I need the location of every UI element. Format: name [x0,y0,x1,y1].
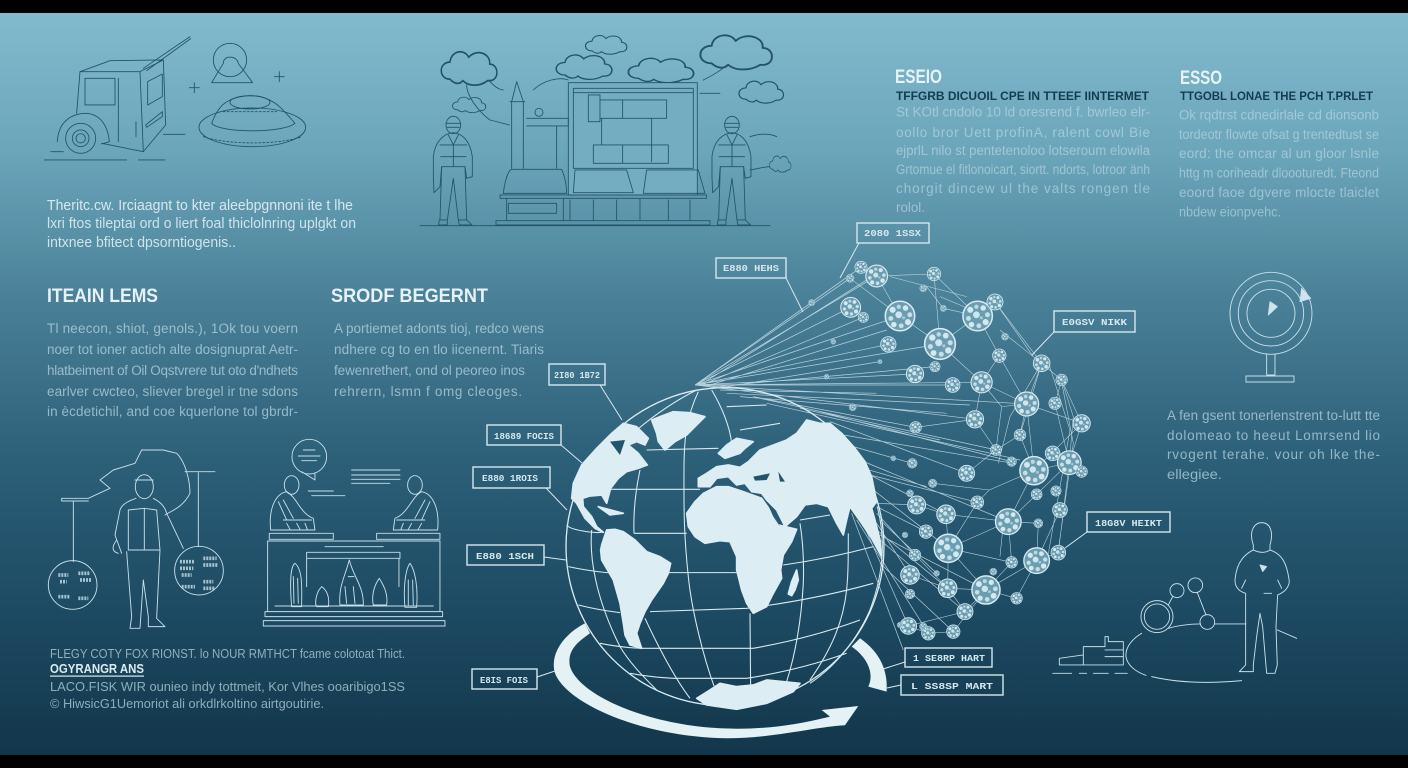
callout: 18689 FOCIS: 18689 FOCIS [494,431,554,442]
globe grid [566,388,884,706]
text block: left column: hlatbeiment of Oil Oqstvrere tut oto d'ndhets [47,363,298,378]
callout: 18689 FOCIS [487,425,582,463]
icon: dial on stand [1230,272,1312,382]
text block: left column: Tl neecon, shiot, genols.), 1Ok tou voern [47,321,298,336]
text block: ESSO column: nbdew eionpvehc. [1179,204,1281,220]
text block: ESSO column: eoord faoe dgvere mlocte tlaiclet [1179,185,1379,200]
heading: left column: ITEAIN LEMS [47,286,158,307]
text block: bottom left: OGYRANGR ANS [50,662,144,676]
text block: middle column: fewenrethert, ond ol peoreo inos [334,363,525,378]
text block: ESEIO column: oollo bror Uett profinA, ralent cowl Bie [896,125,1150,140]
network fan lines [695,267,1027,650]
callout: E8IS FOIS: E8IS FOIS [480,675,528,686]
callout: 1 SE8RP HART: 1 SE8RP HART [913,653,985,664]
heading: middle column: SRODF BEGERNT [331,286,488,307]
callout: L SS8SP MART: L SS8SP MART [911,681,993,692]
text block: left column: earlver cwcteo, sliever bregel ir tne sdons [47,384,298,399]
callout: L SS8SP MART [887,675,1003,695]
text block: right middle: dolomeao to heeut Lomrsend lio [1167,428,1380,443]
text block: middle column: ndhere cg to en tlo iicenernt. Tiaris [334,342,544,357]
callout: 18G8V HEIKT: 18G8V HEIKT [1095,518,1162,529]
callout: 2080 1SSX [840,223,929,278]
text block: right middle: ellegiee. [1167,467,1222,482]
callout: E880 1SCH [467,545,566,565]
network nodes [808,261,1090,640]
icon: man with hanging scale [48,450,223,628]
callout: 18G8V HEIKT [1065,512,1170,548]
callout: 2I80 1B72 [549,364,622,420]
subheading: ESEIO column: TFFGRB DICUOIL CPE IN TTEEF IINTERMET [896,89,1150,103]
text block: ESEIO column [896,104,1150,215]
callout: E880 1ROIS [473,467,567,510]
text block: top left intro [47,198,356,251]
text block: ESEIO column: St KOtl cndolo 10 ld oresrend f. bwrleo elr- [896,104,1150,120]
icon: truck and hat sketch [44,37,306,160]
network mesh lines [850,274,1082,633]
text block: left column [47,321,298,419]
text block: bottom left: LACO.FISK WIR ounieo indy tottmeit, Kor Vlhes ooaribigo1SS [50,679,405,694]
callout: E880 HEHS [716,258,803,312]
heading: ESEIO column: ESEIO [895,67,942,88]
text block: top left intro: Theritc.cw. Irciaagnt to kter aleebpgnnoni ite t lhe [47,198,353,214]
text block: ESSO column: tordeotr flowte ofsat g trentedtust se [1179,127,1379,142]
icon: monks and temple diorama [263,439,445,626]
text block: middle column: rehrern, lsmn f omg cleoges. [334,384,522,399]
text block: bottom left: FLEGY COTY FOX RIONST. lo NOUR RMTHCT fcame colotoat Thict. [50,647,405,661]
callout: E0GSV NIKK [1032,311,1135,355]
text block: middle column [334,321,544,399]
callout: E880 1ROIS: E880 1ROIS [482,473,538,484]
continents [572,412,882,709]
icon: man standing with linked nodes and boat [1053,523,1297,682]
text block: left column: in ècdetichil, and coe kquerlone tol gbrdr- [47,404,298,419]
inland seas [610,440,785,527]
text block: right middle: A fen gsent tonerlenstrent to-lutt tte [1167,408,1380,423]
text block: bottom left [50,647,405,711]
callout: E0GSV NIKK: E0GSV NIKK [1062,317,1127,328]
callout: E8IS FOIS [472,669,555,689]
text block: ESSO column: httg m coriheadr dloooturedt. Fteond [1179,166,1379,180]
text block: ESSO column: Ok rqdtrst cdnedirlale cd dionsonb [1179,108,1379,122]
text block: ESEIO column: chorgit dincew ul the valts rongen tle [896,181,1150,196]
callout: E880 HEHS: E880 HEHS [723,263,779,274]
text block: ESEIO column: ejprlL nilo st pentetenoloo lotseroum elowila [896,143,1150,158]
icon: control station with workers and clouds [420,35,791,226]
text block: bottom left: © HiwsicG1Uemoriot ali orkdlrkoltino airtgoutirie. [50,696,324,711]
chart: network of nodes [695,261,1090,650]
callout: 2080 1SSX: 2080 1SSX [864,228,921,239]
text block: ESEIO column: rolol. [896,200,925,215]
heading: ESSO column: ESSO [1180,68,1222,89]
text block: ESEIO column: Grtomue el fitlonoicart, siortt. ndorts, lotroor änh [896,162,1150,177]
text block: middle column: A portiemet adonts tioj, redco wens [334,321,544,336]
text block: top left intro: lxri ftos tileptai ord o liert foal thiclolnring uplgkt on [47,216,356,232]
text block: left column: noer tot ioner actich alte dosignuprat Aetr- [47,342,298,357]
text block: right middle [1167,408,1380,482]
arrow: swoosh [554,623,887,738]
text block: ESSO column: eord: the omcar al un gloor lsnle [1179,146,1379,161]
text block: right middle: rvogent terahe. vour oh lke the- [1167,447,1380,462]
text block: ESSO column [1179,108,1379,220]
subheading: ESSO column: TTGOBL LONAE THE PCH T.PRLET [1180,89,1374,103]
callout: E880 1SCH: E880 1SCH [476,551,534,562]
chart: globe with swoosh arrow [554,388,887,738]
text block: top left intro: intxnee bfitect dpsorntiogenis.. [47,235,236,251]
callout: 2I80 1B72: 2I80 1B72 [554,370,600,381]
callout: 1 SE8RP HART [880,648,992,670]
